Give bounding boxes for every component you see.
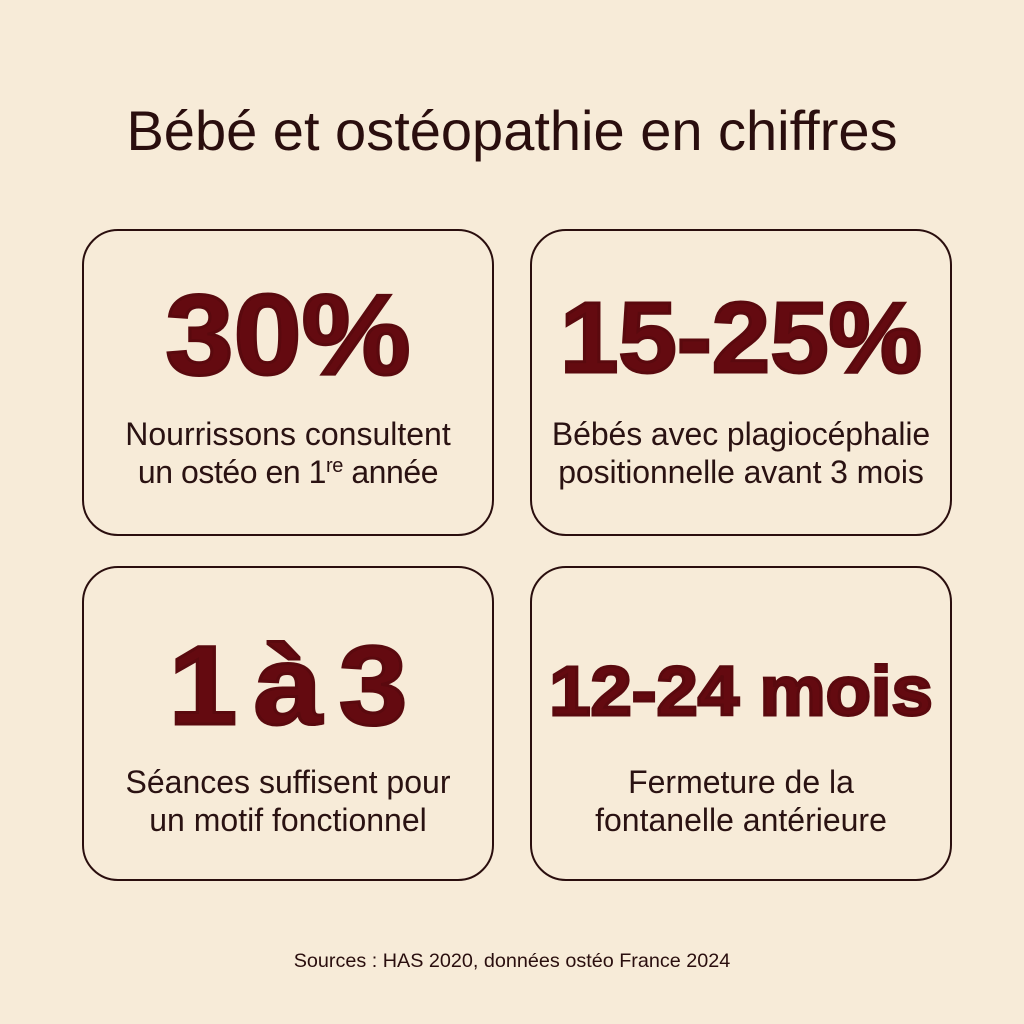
stat: 1 à 3: 1 à 3 (169, 623, 407, 748)
label: nourrissons (125, 416, 451, 490)
label: fontanelle (595, 764, 887, 838)
label: plagiocéphalie: positionnelle avant 3 mois (558, 454, 924, 490)
title: Bébé et ostéopathie en chiffres (126, 99, 898, 162)
stat: 15-25%: 15-25% (560, 282, 922, 394)
panel: 15-25% (530, 229, 952, 536)
sources: Sources : HAS 2020, données ostéo France 2024 (294, 950, 730, 972)
label: nourrissons: un ostéo en 1re année (138, 454, 438, 490)
panel: 12-24 mois (530, 566, 952, 881)
label: nourrissons: Nourrissons consultent (125, 416, 451, 452)
label: séances (126, 764, 450, 838)
stat: 30%: 30% (165, 272, 411, 399)
panel: 1 à 3 (82, 566, 494, 881)
label: plagiocéphalie: Bébés avec plagiocéphalie (552, 416, 930, 452)
label: fontanelle: Fermeture de la (628, 764, 854, 800)
label: plagiocéphalie (552, 416, 930, 490)
label: séances: Séances suffisent pour (126, 764, 450, 800)
panel: 30% (82, 229, 494, 536)
label: séances: un motif fonctionnel (149, 802, 427, 838)
label: fontanelle: fontanelle antérieure (595, 802, 887, 838)
stat: 12-24 mois: 12-24 mois (549, 652, 933, 730)
